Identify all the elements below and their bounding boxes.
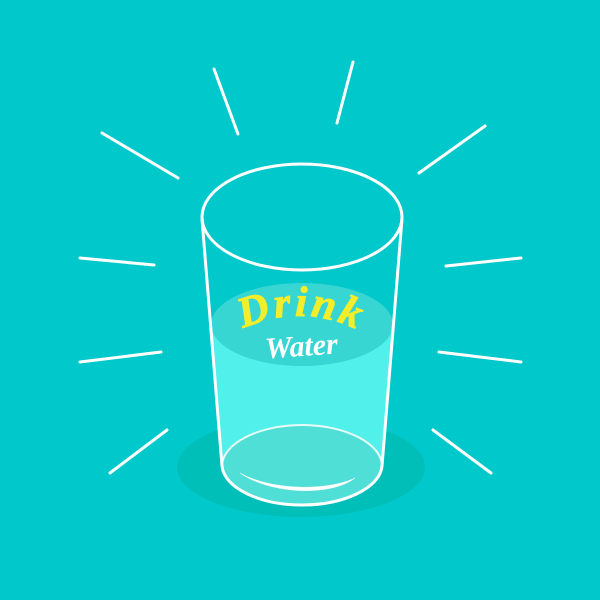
glass outline bbox=[202, 164, 402, 505]
title: Drink: Drink bbox=[238, 286, 364, 329]
glass bottom bbox=[222, 425, 382, 505]
radiating lines bbox=[80, 62, 521, 473]
glass shadow bbox=[177, 417, 425, 517]
subtitle: Water: Water bbox=[264, 328, 339, 366]
water surface bbox=[211, 283, 393, 366]
water body bbox=[211, 322, 393, 505]
